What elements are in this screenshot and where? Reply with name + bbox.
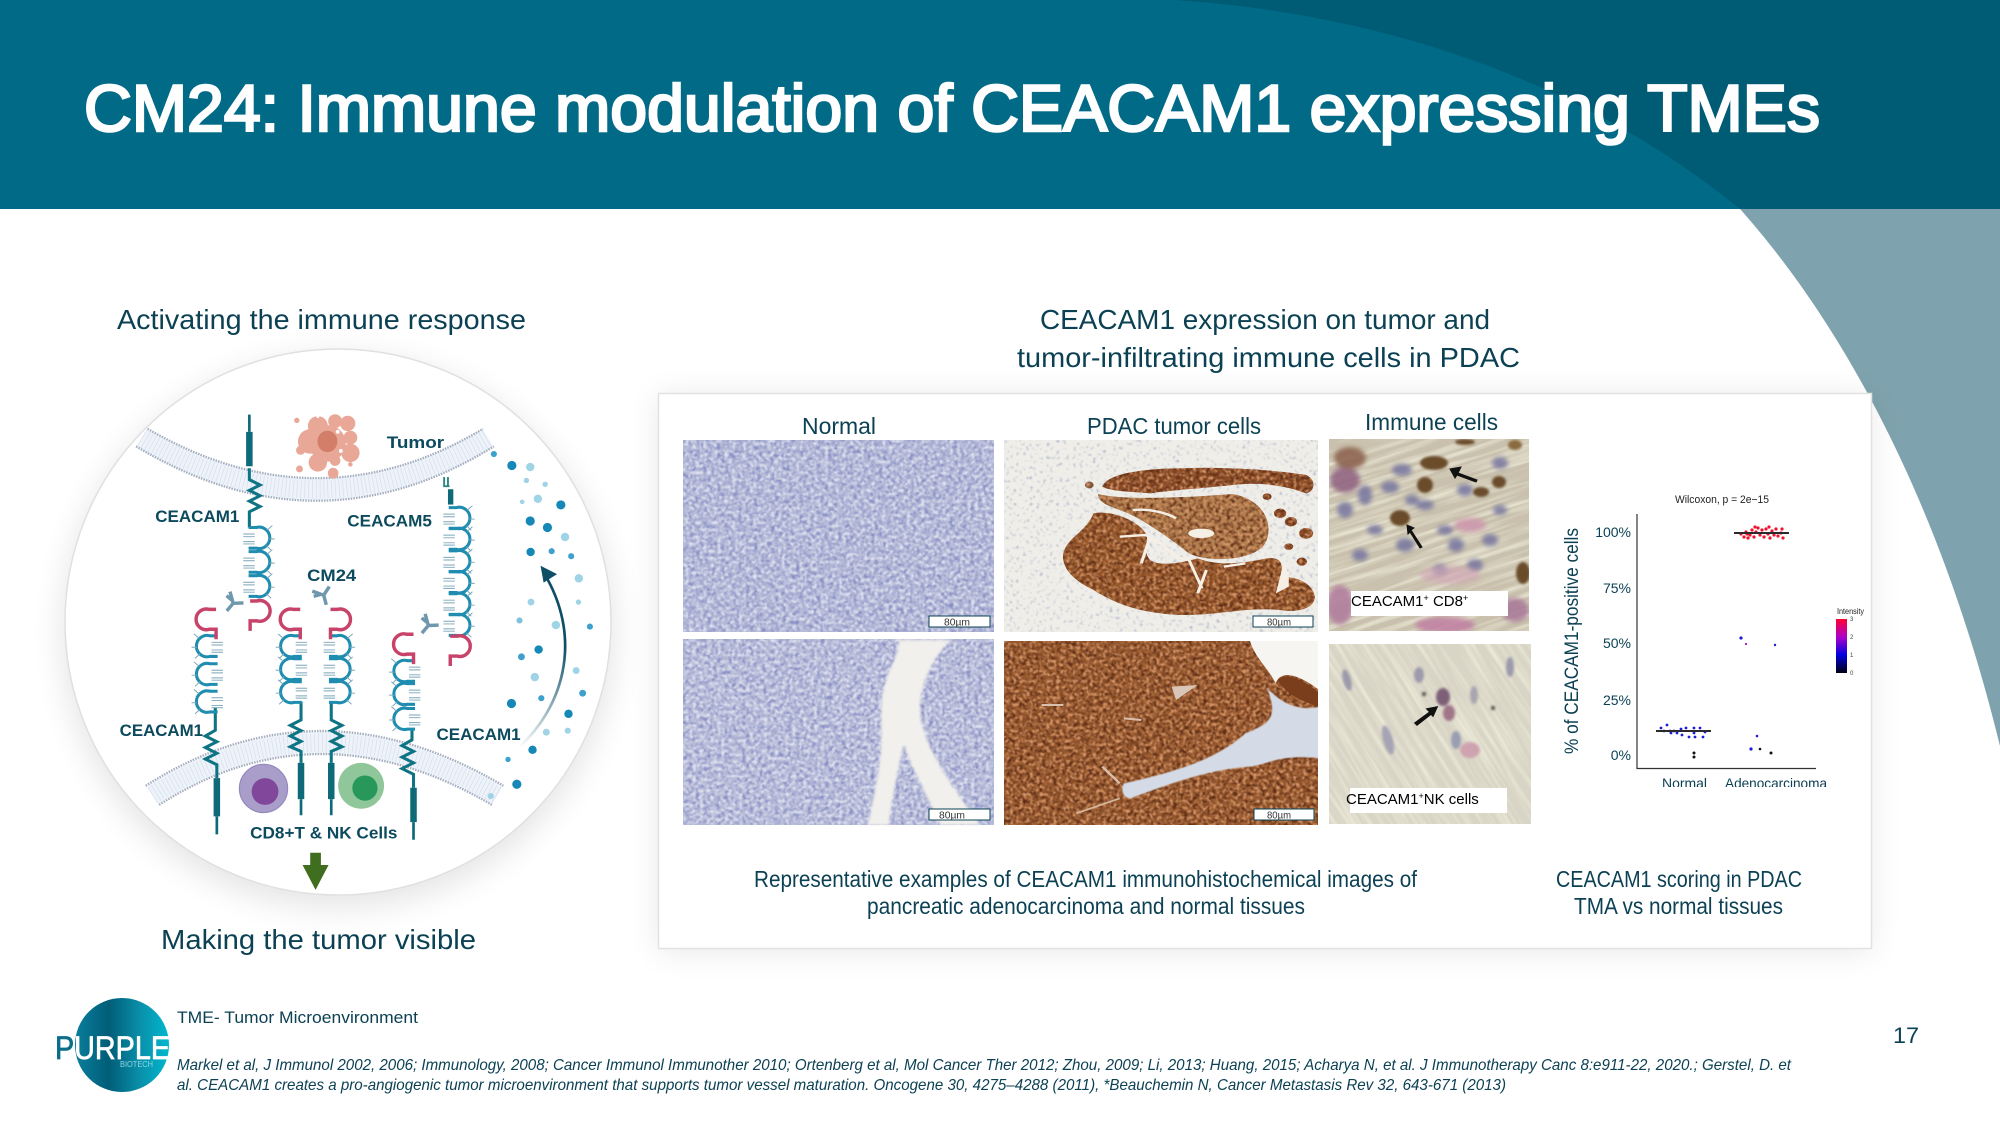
label: CEACAM1+ NK cells: NK cells <box>1424 791 1479 808</box>
column heading: Normal: Normal <box>802 413 876 439</box>
y tick labels: 75% <box>1603 580 1631 596</box>
receptor: immune CEACAM1 right <box>389 634 420 840</box>
image: normal tissue bottom: 80µm <box>939 810 965 822</box>
legend: intensity: 0 <box>1850 671 1854 677</box>
panel: immune mechanism circle diagram <box>62 349 614 908</box>
logo: Purple Biotech <box>55 998 170 1092</box>
receptor: immune CEACAM1 left <box>192 609 223 834</box>
icon: NK cell <box>338 763 384 809</box>
receptor: CEACAM5 <box>443 477 475 666</box>
y tick labels: 100% <box>1595 524 1631 540</box>
label: CEACAM1+ CD8+: + <box>1463 593 1468 603</box>
page number: 17 <box>1893 1023 1919 1048</box>
y tick labels <box>1595 524 1631 763</box>
image: normal tissue top: 80µm <box>944 618 970 628</box>
footnote: abbreviation: TME- Tumor Microenvironment <box>177 1008 418 1027</box>
label: CM24: CM24 <box>307 566 357 585</box>
median lines <box>1656 533 1789 731</box>
image: PDAC tumor bottom: 80µm <box>1267 810 1291 822</box>
label: CEACAM1 right: CEACAM1 <box>436 725 521 744</box>
image: CEACAM1+ NK cells <box>1329 644 1531 824</box>
logo: Purple Biotech: BIOTECH <box>120 1060 153 1069</box>
x tick labels: Normal <box>1662 775 1707 791</box>
image: normal tissue top <box>683 440 994 632</box>
x tick labels: Adenocarcinoma <box>1725 775 1827 791</box>
label: Tumor: Tumor <box>387 433 445 452</box>
lower immune cell membrane <box>146 731 503 805</box>
label: CD8+T & NK cells: CD8+T & NK Cells <box>250 824 397 843</box>
image: PDAC tumor top <box>1004 440 1318 632</box>
footnote: references: al. CEACAM1 creates a pro-angiogenic tumor microenvironment that supports tumor vessel maturation. Oncogene 30, 4275–4288 (2011), *Beauchemin N, Cancer Metastasis Rev 32, 643-671 (2013) <box>177 1077 1506 1094</box>
image: CEACAM1+ CD8+ immune cells <box>1329 439 1529 631</box>
y tick labels: 25% <box>1603 692 1631 708</box>
side arc decoration <box>1740 209 2000 746</box>
image: PDAC tumor top: 80µm <box>1267 618 1291 628</box>
heading: CEACAM1 expression: tumor-infiltrating immune cells in PDAC <box>1017 342 1520 373</box>
column heading: Immune cells: Immune cells <box>1365 409 1498 435</box>
column heading: PDAC tumor cells: PDAC tumor cells <box>1087 413 1261 439</box>
legend: intensity: 1 <box>1850 653 1854 659</box>
y tick labels: 0% <box>1611 747 1631 763</box>
legend: intensity: 2 <box>1850 635 1854 641</box>
icon: tumor cell <box>294 414 360 479</box>
points: normal low <box>1660 636 1776 758</box>
heading: CEACAM1 expression: CEACAM1 expression on tumor and <box>1040 304 1490 335</box>
legend: intensity: 3 <box>1850 617 1854 623</box>
label: CEACAM1+ CD8+: + <box>1424 593 1429 603</box>
label: CEACAM1 left: CEACAM1 <box>120 721 203 740</box>
caption: CEACAM1 scoring <box>1556 866 1802 919</box>
label: CEACAM1+ NK cells: CEACAM1 <box>1346 791 1419 808</box>
arrow: curved upward <box>519 566 565 748</box>
receptor: immune CEACAM1 centre left <box>276 609 307 815</box>
secreted dots <box>488 451 593 799</box>
x tick labels <box>1663 778 1826 787</box>
logo: Purple Biotech: PURPLE <box>55 1030 170 1066</box>
receptor: immune CEACAM1 centre right <box>324 609 355 815</box>
label: CEACAM1+ NK cells <box>1346 788 1507 813</box>
image: normal tissue bottom <box>683 639 994 825</box>
icon: CD8+ T cell <box>239 764 288 813</box>
caption: representative examples: pancreatic adenocarcinoma and normal tissues <box>867 893 1305 919</box>
footnote: references <box>177 1057 1792 1094</box>
caption: representative examples: Representative examples of CEACAM1 immunohistochemical images of <box>754 866 1418 892</box>
icon: CM24 antibodies <box>219 587 439 638</box>
chart title: Wilcoxon, p = 2e−15 <box>1675 494 1769 506</box>
chart: CEACAM1 positivity scatter <box>1562 494 1864 791</box>
label: CEACAM1+ CD8+: CD8 <box>1429 593 1463 610</box>
caption: representative examples <box>754 866 1418 919</box>
label: CEACAM1+ NK cells: + <box>1419 791 1424 801</box>
caption: CEACAM1 scoring: CEACAM1 scoring in PDAC <box>1556 866 1802 892</box>
header band <box>0 0 2000 209</box>
panel: histology and scoring <box>658 338 1872 952</box>
heading: activating the immune response: Activating the immune response <box>117 304 526 335</box>
y tick labels: 50% <box>1603 635 1631 651</box>
legend: intensity <box>1836 607 1864 677</box>
caption: CEACAM1 scoring: TMA vs normal tissues <box>1574 893 1783 919</box>
title: CM24: Immune modulation of CEACAM1 expressing TMEs <box>84 71 1820 145</box>
label: CEACAM1 top: CEACAM1 <box>155 507 239 526</box>
heading: making the tumor visible: Making the tumor visible <box>161 924 476 955</box>
footnote: references: Markel et al, J Immunol 2002, 2006; Immunology, 2008; Cancer Immunol Immunother 2010; Ortenberg et al, Mol Cancer Ther 2012; Zhou, 2009; Li, 2013; Huang, 2015; Acharya N, et al. J Immunotherapy Canc 8:e911-22, 2020.; Gerstel, D. et <box>177 1057 1792 1074</box>
label: CEACAM5: CEACAM5 <box>347 512 432 531</box>
heading: CEACAM1 expression <box>1017 304 1520 373</box>
arrow: NK pointer <box>1415 707 1437 725</box>
axes <box>1637 514 1816 768</box>
legend: intensity: Intensity <box>1837 607 1864 616</box>
arrow: cell pointer one <box>1450 467 1477 482</box>
points: adenocarcinoma high <box>1739 525 1785 540</box>
arrow: cell pointer two <box>1407 525 1422 548</box>
receptor: tumor CEACAM1 <box>243 415 275 631</box>
label: CEACAM1+ CD8+: CEACAM1 <box>1351 593 1424 610</box>
y axis label: % of CEACAM1-positive cells <box>1562 528 1583 754</box>
image: PDAC tumor bottom <box>1004 640 1319 825</box>
upper tumor membrane <box>136 429 494 501</box>
arrow: green down <box>303 853 329 890</box>
label: CEACAM1+ CD8+ <box>1351 591 1508 616</box>
